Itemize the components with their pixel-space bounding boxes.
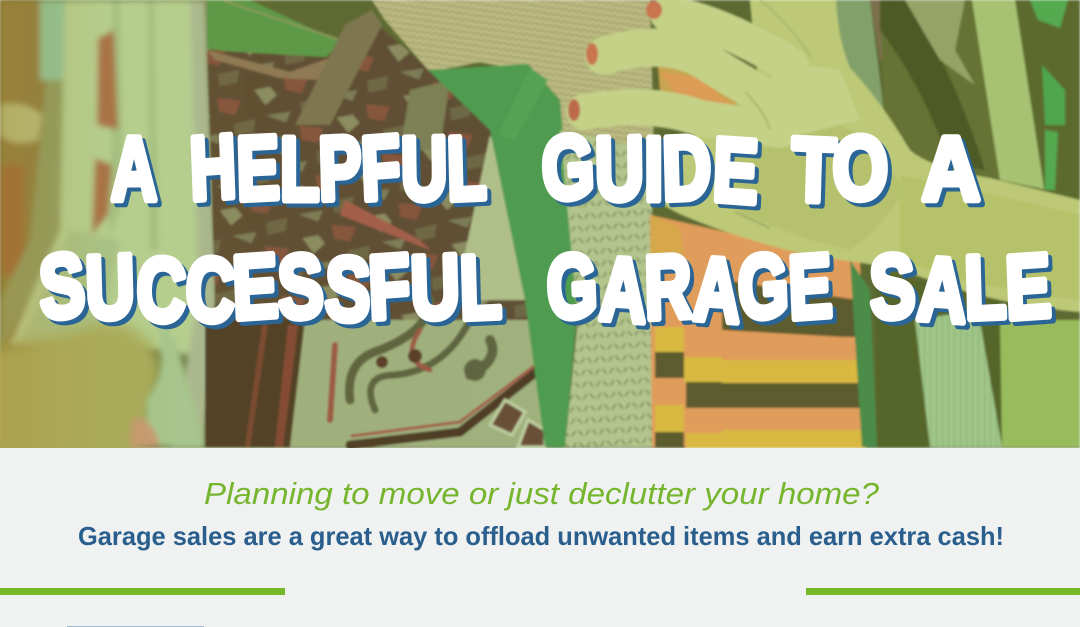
title: GUIDE [539,117,761,222]
upper right garments [835,0,884,109]
blurred hand lower left [0,318,162,448]
intro question: Planning to move or just declutter your home? [204,476,880,511]
photo: hand browsing clothes on a rack with green tint [0,0,1080,470]
title: A [111,120,157,220]
title: TO [790,118,890,222]
right green rule [806,588,1080,595]
title: A [922,120,980,220]
red nails [646,1,662,19]
beige knit top [372,0,545,72]
clipped blue shape at bottom edge [67,626,204,627]
patterned dress [206,28,528,321]
intro statement: Garage sales are a great way to offload unwanted items and earn extra cash! [78,521,1004,551]
left green rule [0,588,285,595]
scarf glimpses between fingers [656,66,738,106]
green sweater [428,64,578,447]
chunky knit [560,130,652,447]
left warm tint [0,0,92,448]
title: SALE [867,237,1053,342]
title: GARAGE [544,236,834,341]
green collar [207,0,340,62]
dark green edging and right side clothes [850,260,877,447]
striped scarf [650,215,866,448]
title [35,117,1053,342]
title: HELPFUL [187,118,488,220]
left clothing group [0,0,218,447]
dark panel of dress lower left [205,320,305,447]
icon: hand and arm [584,0,1080,312]
paisley pattern [330,300,545,445]
title: SUCCESSFUL [35,236,503,342]
